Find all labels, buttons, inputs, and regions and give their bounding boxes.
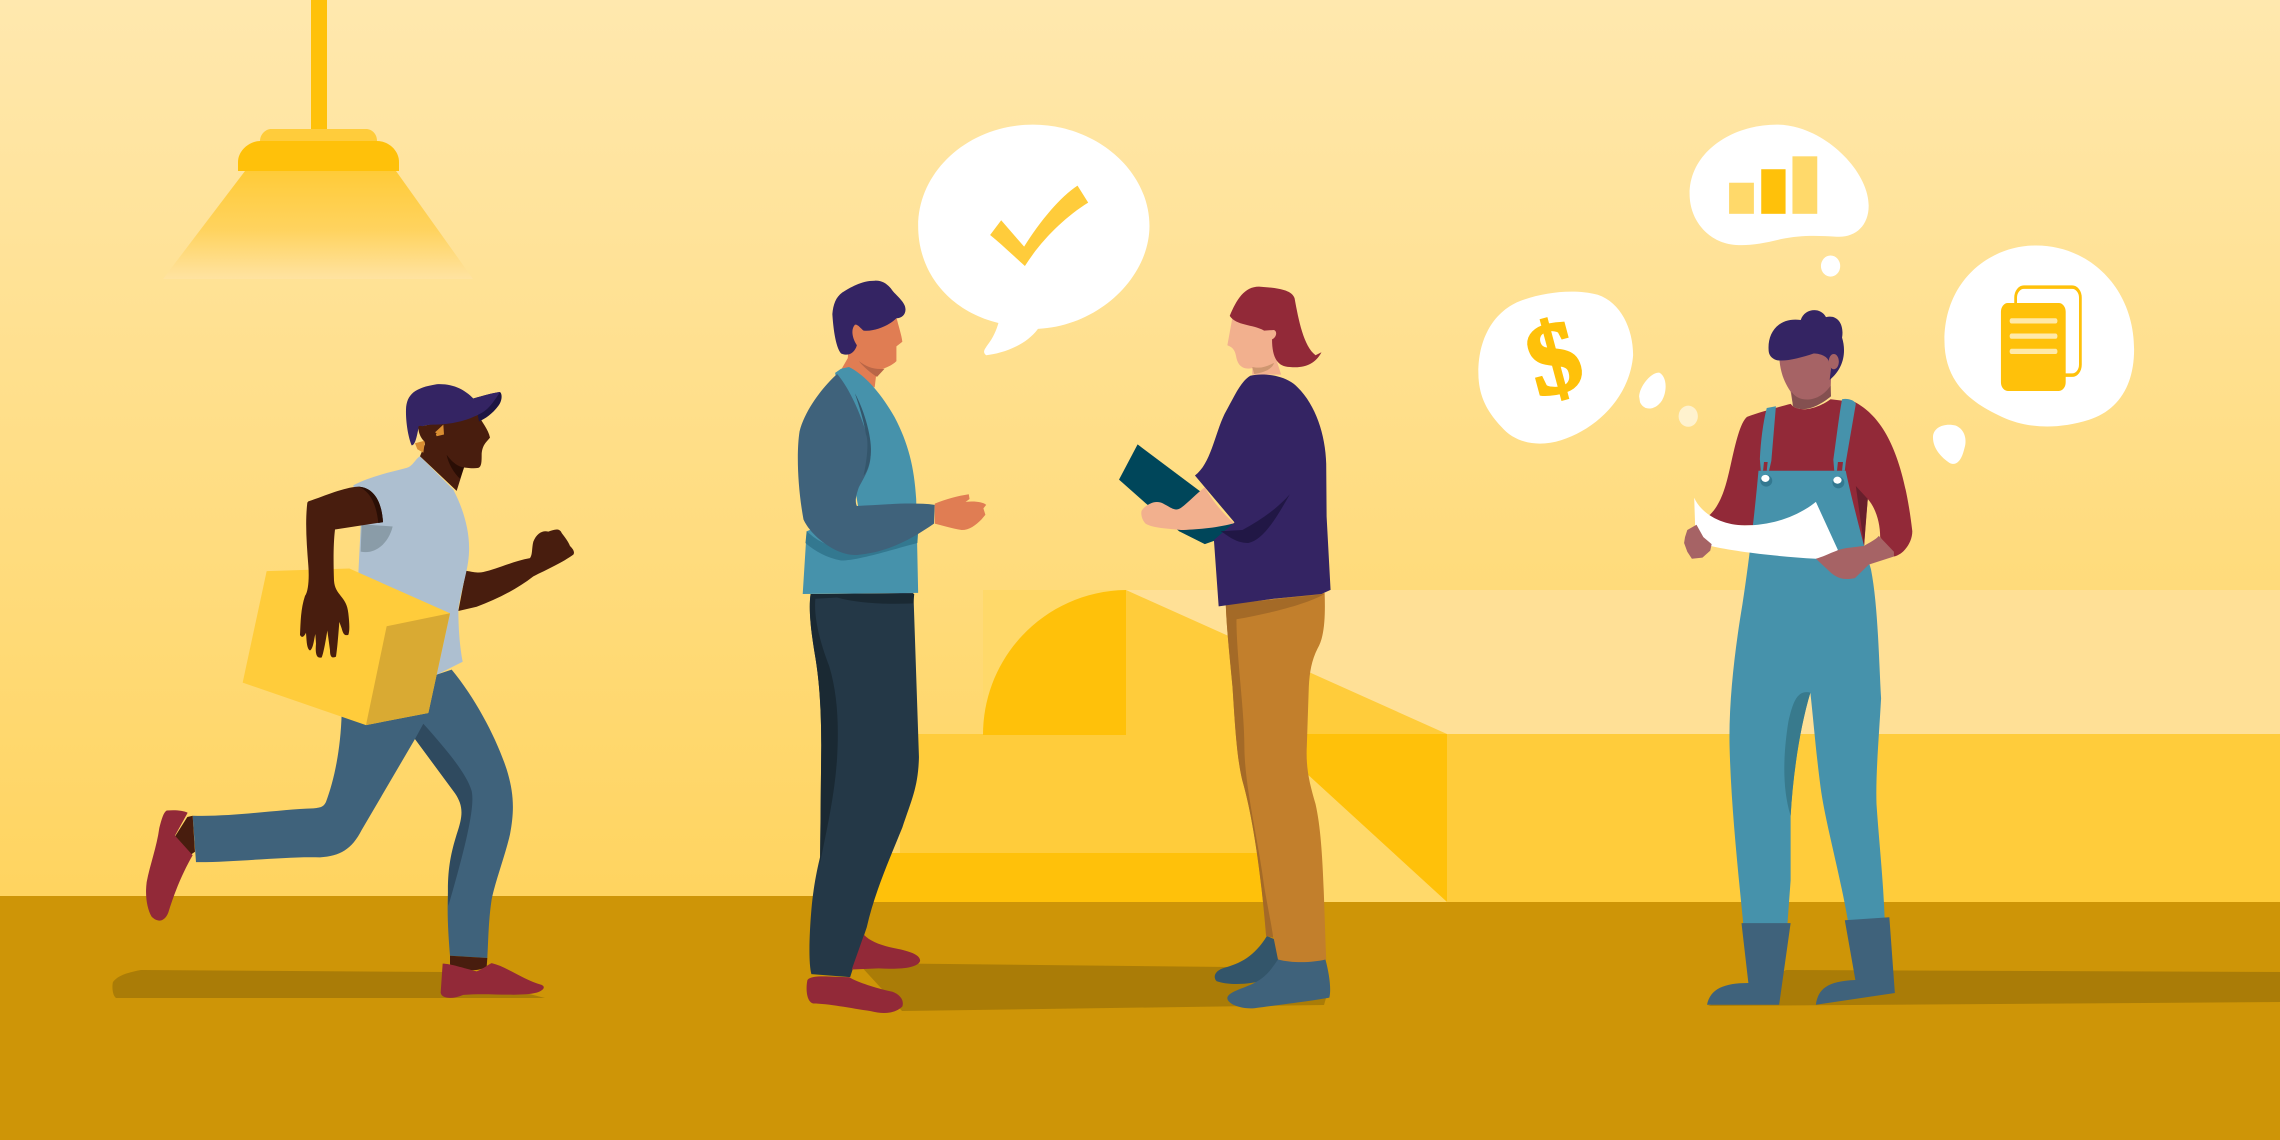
right boot	[1816, 917, 1895, 1005]
background geometric shapes	[870, 590, 2280, 902]
arm shadow on shirt	[361, 524, 393, 552]
man hand	[935, 494, 986, 530]
arm crease	[358, 487, 383, 523]
paper	[1694, 498, 1838, 559]
rear ankle	[175, 816, 195, 855]
lamp light beam	[163, 171, 473, 279]
figure: man and woman talking	[798, 125, 1331, 1013]
background wall	[0, 0, 2280, 902]
worker hair	[1769, 310, 1844, 380]
thought bubble: documents	[1944, 246, 2134, 426]
woman trouser shadow	[1226, 594, 1325, 938]
cap	[406, 384, 500, 445]
box side face	[366, 613, 450, 725]
overall buttons	[1760, 475, 1844, 488]
woman front shoe	[1227, 960, 1330, 1008]
far arm	[458, 530, 574, 611]
sweater inner shadow	[1856, 486, 1868, 546]
thought bubble: bar chart	[1690, 125, 1869, 245]
lamp pole	[311, 0, 327, 130]
floor shadows	[112, 963, 2280, 1011]
woman hair	[1230, 287, 1321, 367]
overalls leg shadow	[1784, 692, 1810, 816]
man head	[841, 317, 902, 387]
lamp cap	[260, 129, 377, 141]
near arm and hand	[300, 487, 383, 658]
cap brim	[473, 392, 502, 422]
icon: dollar sign: $	[1515, 297, 1593, 420]
thought dot	[1639, 373, 1666, 409]
woman neck shadow	[1252, 363, 1274, 374]
man trousers	[809, 593, 919, 977]
man vest	[803, 367, 918, 594]
box top face	[243, 569, 450, 725]
front ankle	[450, 956, 487, 970]
worker face	[1779, 352, 1834, 407]
thought dot	[1933, 425, 1966, 464]
worker ear	[1829, 354, 1839, 369]
man sleeve	[798, 374, 935, 555]
figure: worker in overalls with thought bubbles	[1478, 125, 2134, 1005]
lamp	[163, 0, 473, 279]
book	[1119, 444, 1234, 544]
woman face and neck	[1227, 317, 1282, 375]
man hair	[832, 281, 906, 355]
hair under cap	[415, 425, 444, 453]
thought dot faint	[1679, 406, 1698, 427]
man front shoe	[807, 976, 903, 1013]
icon: check mark	[990, 186, 1088, 266]
woman top shadow	[1221, 494, 1290, 543]
overalls	[1729, 471, 1885, 924]
woman arm	[1141, 487, 1233, 530]
man rear shoe	[852, 935, 920, 969]
right hand	[1816, 536, 1894, 579]
head	[420, 415, 490, 491]
trousers	[193, 670, 513, 958]
trouser shadow	[415, 724, 472, 906]
man neck shadow	[859, 361, 885, 377]
rear shoe	[146, 810, 193, 921]
woman trousers	[1226, 593, 1326, 963]
worker sweater	[1708, 399, 1912, 556]
speech bubble	[918, 125, 1149, 355]
overall straps	[1760, 399, 1856, 471]
front shoe	[441, 963, 544, 998]
sleeve fold	[855, 393, 871, 475]
shirt	[353, 456, 469, 675]
worker neck shadow	[1792, 386, 1831, 409]
floor	[0, 896, 2280, 1140]
thought bubble: dollar background	[1478, 292, 1633, 444]
left hand	[1684, 525, 1712, 559]
figure: running courier with box	[146, 384, 574, 998]
left boot	[1707, 923, 1791, 1005]
woman top	[1195, 375, 1331, 606]
man trouser shadow	[810, 594, 914, 863]
neck shadow	[447, 455, 464, 479]
ear	[418, 426, 437, 444]
thought dot	[1821, 255, 1840, 277]
vest shadow	[805, 531, 918, 561]
woman rear shoe	[1215, 936, 1280, 984]
lamp shade	[238, 141, 399, 171]
